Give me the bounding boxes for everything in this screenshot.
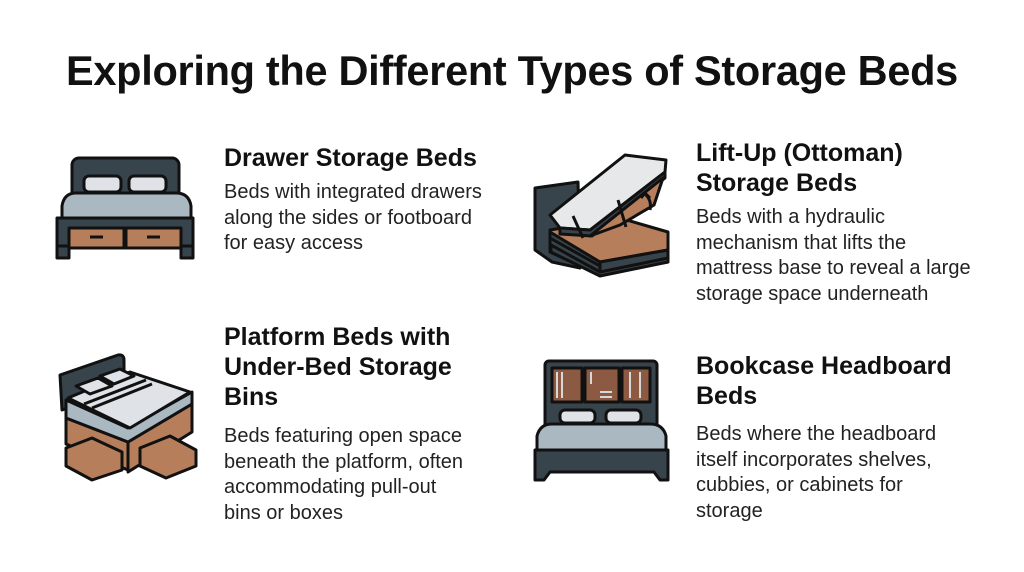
text: drawer description: along the sides or footboard (224, 206, 472, 228)
text: bookcase description: storage (696, 500, 763, 522)
text: lift-up description: Beds with a hydraulic (696, 206, 885, 228)
heading: platform beds: Under-Bed Storage (224, 353, 452, 381)
text: bookcase description: Beds where the headboard (696, 423, 936, 445)
heading: lift-up (696, 139, 903, 197)
heading: bookcase headboard (696, 352, 952, 410)
heading: platform beds: Bins (224, 383, 278, 411)
heading: lift-up: Lift-Up (Ottoman) (696, 139, 903, 167)
heading: bookcase headboard: Bookcase Headboard (696, 352, 952, 380)
heading: platform beds: Platform Beds with (224, 323, 450, 351)
text: lift-up description (696, 206, 971, 304)
heading: platform beds (224, 323, 452, 411)
icon: platform bed with bins (60, 355, 196, 480)
text: platform description: Beds featuring open space (224, 425, 462, 447)
title: Exploring the Different Types of Storage Beds (66, 47, 958, 94)
text: drawer description: for easy access (224, 232, 363, 254)
text: lift-up description: mattress base to reveal a large (696, 257, 971, 279)
text: drawer description (224, 181, 482, 254)
icon: lift-up ottoman bed (535, 155, 668, 276)
text: bookcase description: itself incorporates shelves, (696, 448, 932, 470)
text: bookcase description: cubbies, or cabinets for (696, 474, 903, 496)
text: platform description (224, 425, 463, 524)
icon: bookcase headboard bed (535, 361, 668, 480)
text: platform description: accommodating pull-out (224, 476, 436, 498)
text: lift-up description: storage space underneath (696, 282, 928, 304)
heading: bookcase headboard: Beds (696, 382, 757, 410)
text: platform description: bins or boxes (224, 502, 343, 524)
text: bookcase description (696, 423, 936, 522)
text: platform description: beneath the platform, often (224, 450, 463, 472)
text: drawer description: Beds with integrated drawers (224, 181, 482, 203)
icon: drawer storage bed (57, 158, 193, 258)
text: lift-up description: mechanism that lifts the (696, 232, 906, 254)
heading: drawer storage beds: Drawer Storage Beds (224, 144, 477, 172)
heading: lift-up: Storage Beds (696, 169, 857, 197)
